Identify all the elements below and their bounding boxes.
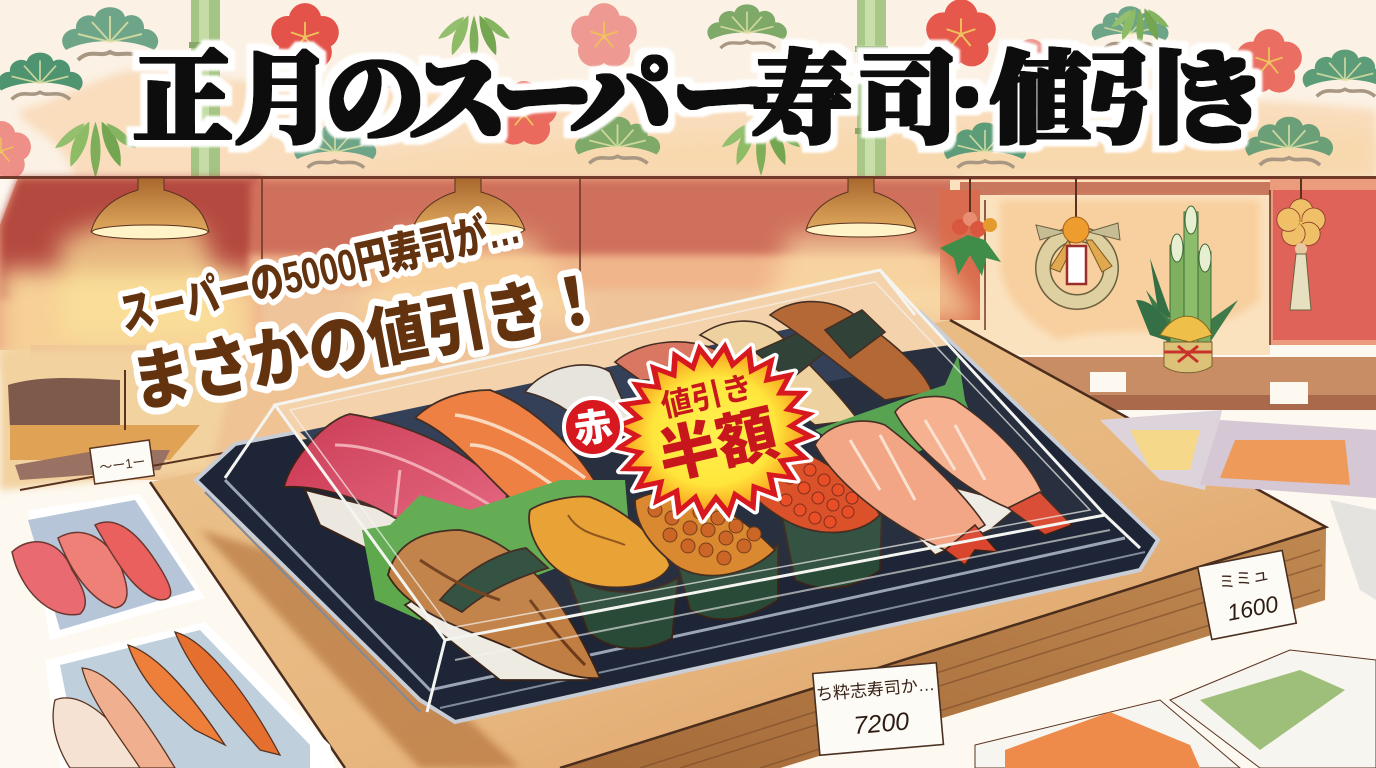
badge: half price: 半額 <box>652 399 784 492</box>
panel: left tuna tray <box>12 494 205 640</box>
red circle label <box>564 398 622 456</box>
icon: plum tassel <box>1277 178 1325 310</box>
small price tag: 〜ー1ー <box>98 454 146 475</box>
subtitle: スーパーの5000円寿司が… <box>115 203 524 340</box>
price card: 7200 <box>813 663 943 755</box>
title: 正月のスーパー寿司·値引き <box>133 19 1268 163</box>
sushi: tuna <box>284 414 507 565</box>
starburst <box>597 325 831 537</box>
sushi: squid <box>525 365 640 440</box>
badge: half price <box>564 325 831 537</box>
bamboo leaves <box>55 8 1169 178</box>
clear plastic lid <box>225 270 1140 712</box>
sushi: red ikura gunkan <box>750 454 882 588</box>
shiso leaves <box>362 355 975 620</box>
panel: right side trays <box>975 410 1376 768</box>
badge text: 値引き <box>658 369 756 424</box>
price card: 1600: 1600 <box>1225 590 1280 626</box>
panel: shop wall <box>0 176 1376 480</box>
price card: 1600 <box>1198 550 1296 640</box>
sushi: salmon roe gunkan <box>635 492 778 619</box>
icon: shimenawa wreath <box>1036 178 1120 302</box>
sushi: red fish <box>615 342 720 380</box>
sushi: salmon <box>415 390 600 503</box>
panel: wooden counter <box>150 320 1326 768</box>
icon: kadomatsu <box>1136 206 1238 373</box>
sushi: shrimp pair <box>815 396 1072 565</box>
panel: right shelf <box>1020 357 1376 410</box>
subtitle: まさかの値引き！ <box>125 261 611 421</box>
price card: 7200: ち粋志寿司か… <box>815 675 935 704</box>
icon: nanten berries <box>940 178 1001 276</box>
panel: left back shelf <box>0 350 240 490</box>
sushi: yellowtail with nori <box>700 321 858 425</box>
panel: sushi tray <box>196 270 1158 722</box>
tuna sushi <box>12 522 171 615</box>
icon: hanging lamps <box>60 178 980 340</box>
price card: 1600: ミミュ <box>1217 565 1271 593</box>
shrimp sushi <box>53 632 280 768</box>
panel: left shrimp tray <box>45 622 335 768</box>
pine motifs <box>0 4 1376 168</box>
price card: 7200: 7200 <box>852 707 910 740</box>
sushi: conger eel <box>388 530 600 680</box>
red circle label: 赤 <box>572 406 615 452</box>
sushi: sea urchin gunkan <box>529 497 678 648</box>
sushi: eel with nori <box>770 302 932 400</box>
small price tag <box>90 440 154 484</box>
bamboo stalks <box>189 0 888 178</box>
plum blossoms <box>0 0 1302 179</box>
panel: new year pattern band <box>0 0 1376 179</box>
